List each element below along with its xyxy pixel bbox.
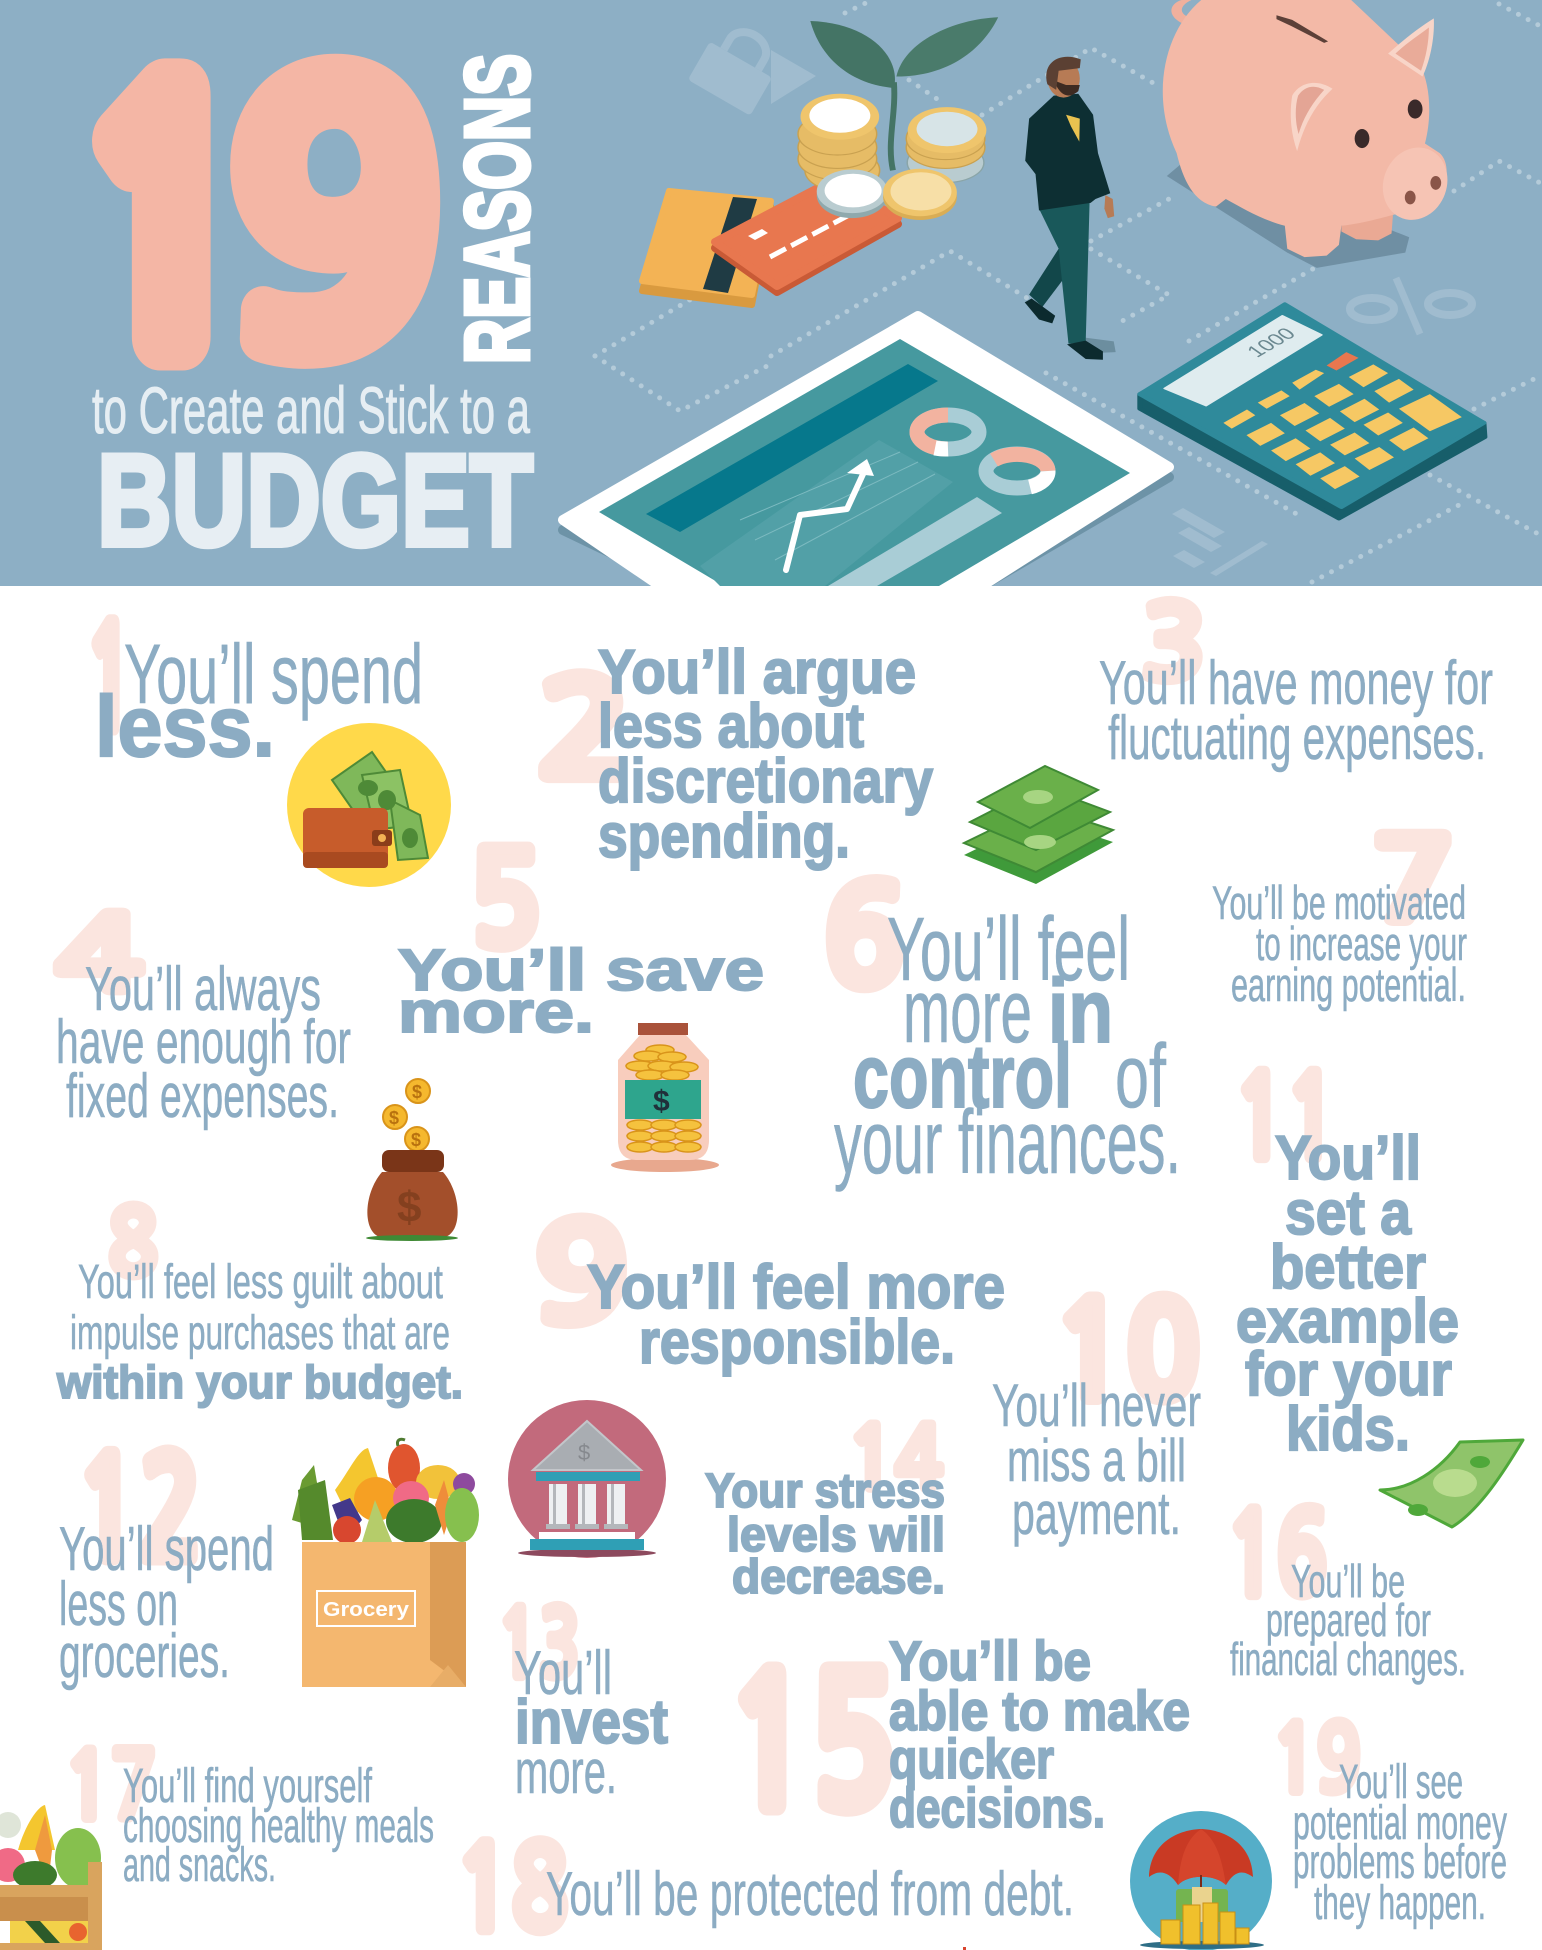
icon: wallet with cash in yellow circle [287,723,451,887]
illustration: plant and coins [798,17,998,220]
reason 10 text: miss a bill [1007,1427,1186,1494]
icon: grocery bag with vegetables: Grocery [323,1599,410,1621]
icon: stack of green banknotes [964,766,1113,884]
icon: coin jar [611,1023,719,1172]
reason 9 text: You’ll feel more [587,1253,1005,1322]
reason 2 text: You’ll argue [598,638,916,707]
reason 6 text: your finances. [834,1093,1181,1193]
icon: bank building in rose circle [508,1400,666,1558]
ghost reason numbers: 12 [76,1441,202,1579]
icon: faint triangle watermark [771,50,816,104]
icon: donut chart one [917,415,979,449]
reason 13 text: more. [515,1738,617,1807]
reason 6 text: more [903,962,1032,1062]
ghost reason numbers: 4 [56,905,143,1006]
ghost reason numbers: 10 [1053,1287,1200,1418]
reason 11 text [1236,1124,1459,1464]
title: 19: 1 [81,60,249,390]
reason 9 text [587,1253,1005,1377]
ghost reason numbers: 11 [1234,1062,1337,1174]
reason 4 text: You’ll always [85,955,321,1024]
reason 12 text: groceries. [59,1622,230,1691]
reason 8 text: within your budget. [56,1356,463,1408]
reason 4 text: have enough for [56,1008,351,1077]
illustration: walking man [1025,57,1116,360]
small red mark at bottom edge [963,1947,966,1950]
reason 19 text [1293,1756,1507,1930]
icon: grocery bag with vegetables [292,1439,479,1687]
reason 17 text: and snacks. [123,1839,276,1892]
reason 6 text [834,900,1181,1193]
ghost reason numbers: 14 [847,1417,943,1501]
reason 17 text: choosing healthy meals [123,1800,434,1853]
reason 8 text [56,1256,463,1408]
ghost reason numbers: 3 [1141,594,1206,695]
icon: crate of vegetables [0,1805,102,1950]
ghost reason numbers: 17 [64,1741,157,1832]
icon: donut chart two [986,454,1048,488]
reason 13 text: invest [515,1688,668,1757]
reason 5 text [398,938,764,1045]
ghost reason numbers: 19 [1272,1714,1361,1805]
reason 1 text: less. [95,679,275,775]
reason 14 text: decrease. [732,1551,945,1604]
reason 12 text: less on [59,1570,178,1639]
reason 11 text: You’ll [1275,1124,1421,1193]
icon: money bag with coins: $ [389,1108,399,1128]
reason 6 text: You’ll feel [887,900,1130,1000]
reason 16 text: prepared for [1266,1594,1431,1646]
ghost reason numbers: 18 [455,1833,568,1947]
reason 17 text [123,1760,434,1892]
icon: flying banknote [1380,1440,1523,1527]
title: 19 [81,47,440,398]
reason 15 text: able to make [889,1679,1190,1742]
reason 13 text: You’ll [514,1639,612,1708]
ghost reason numbers: 6 [824,872,904,1006]
title: to Create and Stick to a: to Create and Stick to a [92,373,530,447]
reason 15 text: decisions. [889,1776,1105,1839]
dotted isometric path lines [595,0,1542,582]
ghost reason numbers: 13 [497,1599,580,1690]
icon: money bag with coins: $ [412,1082,422,1102]
ghost reason numbers [56,594,1455,1947]
reason 2 text: spending. [598,802,850,871]
ghost reason numbers: 15 [727,1655,895,1833]
reason 10 text: You’ll never [992,1372,1201,1439]
reason 5 text: more. [398,980,594,1045]
reason 6 text: in [1048,962,1113,1062]
title: BUDGET: BUDGET [97,427,533,573]
reason 11 text: better [1270,1233,1426,1302]
illustration: calculator [1140,304,1485,519]
reason 19 text: You’ll see [1339,1756,1463,1809]
reason 10 text [992,1372,1201,1547]
reason 11 text: set a [1285,1179,1411,1248]
reason 2 text: less about [598,692,864,761]
illustration: piggy bank [1163,0,1453,268]
reason 17 text: You’ll find yourself [123,1760,372,1813]
icon: money bag with coins: $ [397,1183,421,1232]
ghost reason numbers: 9 [535,1209,628,1341]
icon: bank building in rose circle: $ [578,1440,590,1465]
reason 6 text: of [1115,1027,1167,1127]
reason 6 text: control [853,1027,1072,1127]
panel: header banner [0,0,1542,616]
reason 5 text: You’ll save [398,938,764,1003]
icon: coin jar: $ [653,1085,670,1118]
reason 11 text: example [1236,1287,1459,1356]
reason 15 text: You’ll be [889,1629,1091,1692]
reason 8 text: You’ll feel less guilt about [78,1256,443,1309]
reason 4 text [56,955,351,1131]
reason 14 text [705,1465,945,1604]
icon: faint bar chart watermark [1172,508,1268,576]
icon: faint padlock watermark [688,17,786,116]
calculator display digits: 1000 [1242,325,1301,361]
ghost reason numbers: 8 [108,1198,158,1289]
reason 16 text [1230,1555,1466,1685]
reason 11 text: kids. [1286,1395,1410,1464]
ghost reason numbers: 5 [470,838,541,965]
ghost reason numbers: 1 [85,610,134,750]
reason 12 text: You’ll spend [59,1515,274,1584]
reason 2 text [598,638,933,871]
icon: money bag with coins: $ [411,1130,421,1150]
reason 1 text [95,627,423,775]
reason 18 text: You’ll be protected from debt. [546,1860,1074,1929]
reason 14 text: Your stress [705,1465,945,1518]
icon: money bag with coins [366,1079,458,1241]
reason 8 text: impulse purchases that are [70,1307,450,1360]
icon: faint percent watermark [1350,278,1472,334]
reason 1 text: You’ll spend [124,627,423,721]
reason 15 text [889,1629,1190,1839]
illustration: tablet with charts [540,316,1180,616]
reason 4 text: fixed expenses. [66,1062,339,1131]
reason 9 text: responsible. [639,1308,955,1377]
reason 3 text [1099,649,1493,773]
reason 7 text [1212,876,1467,1011]
icon: umbrella over money [1130,1811,1272,1950]
reason 15 text: quicker [889,1727,1054,1790]
illustration: credit cards [642,180,898,305]
ghost reason numbers: 2 [537,665,632,796]
ghost reason numbers: 7 [1372,825,1455,937]
reason 10 text: payment. [1012,1480,1181,1547]
reason 14 text: levels will [727,1509,945,1562]
reason 2 text: discretionary [598,747,933,816]
reason 11 text: for your [1245,1340,1452,1409]
reason 12 text [59,1515,274,1691]
ghost reason numbers: 16 [1226,1500,1327,1611]
reason 13 text [514,1639,668,1807]
reason 16 text: You’ll be [1291,1555,1405,1607]
title: 19: 9 [230,47,440,398]
